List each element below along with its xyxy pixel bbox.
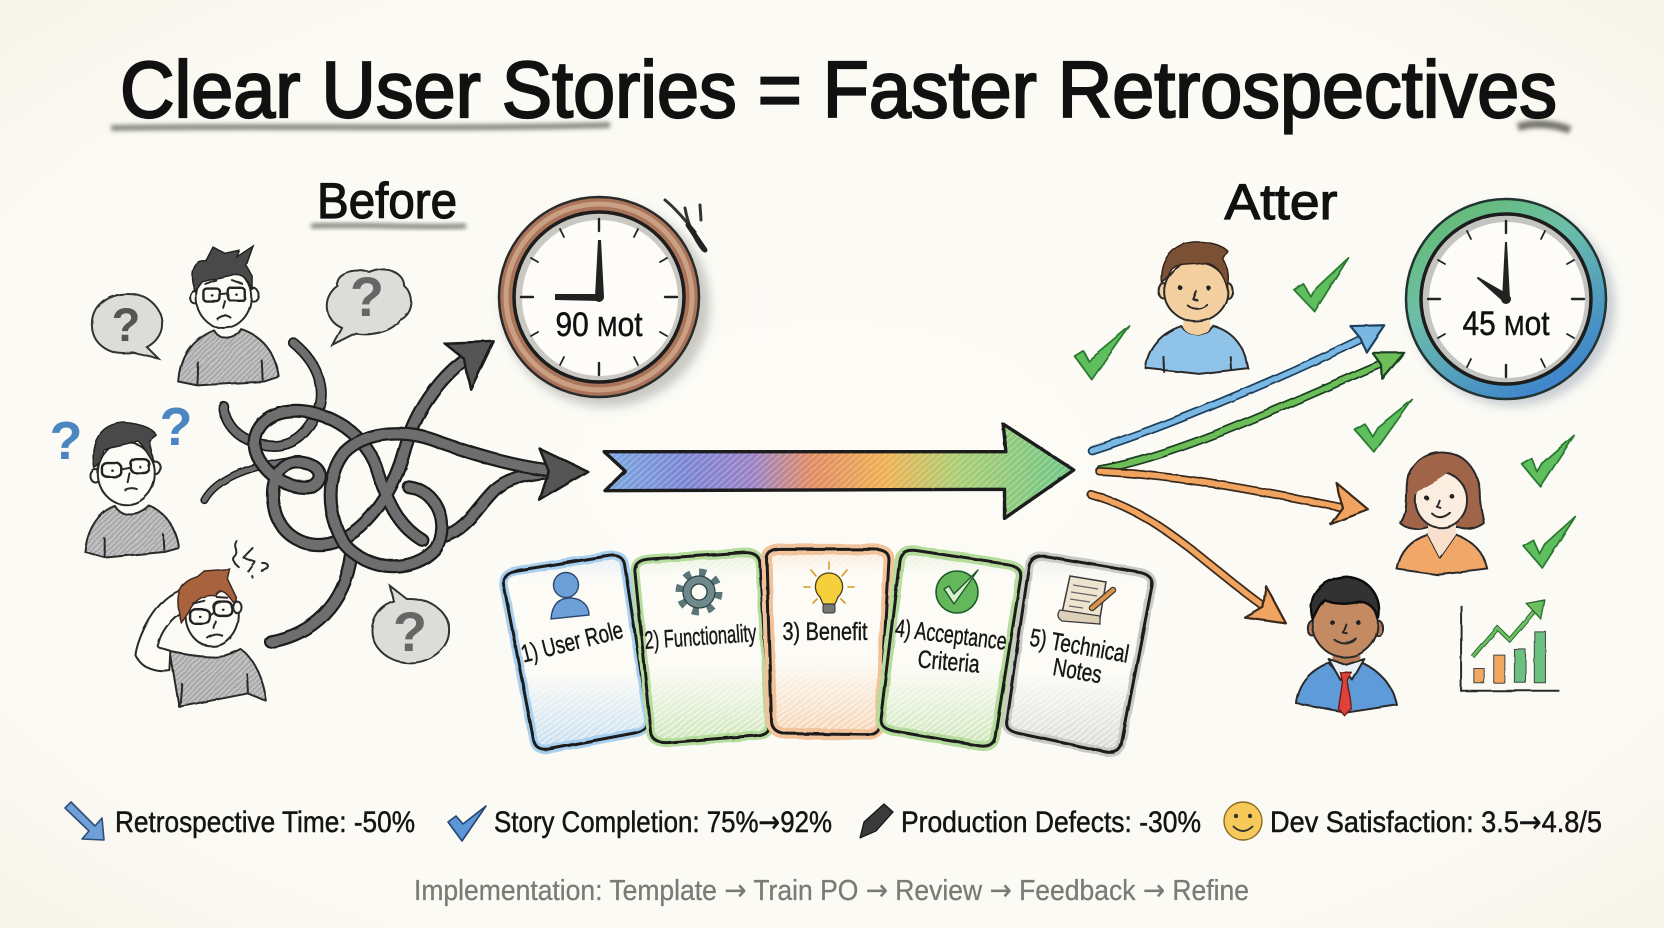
label: notes: Notes	[1051, 653, 1104, 689]
icon: acceptance check	[936, 570, 978, 613]
metric: story completion: Story Completion: 75%→92%	[494, 805, 832, 840]
person: top worried teammate	[178, 246, 279, 385]
question mark: bubble three: ?	[393, 600, 427, 663]
icon: pen	[860, 804, 893, 838]
clock: 90 minutes	[499, 197, 710, 407]
card: acceptance criteria	[881, 550, 1021, 746]
arrow: green to clock	[1100, 353, 1404, 470]
growth chart	[1461, 600, 1559, 691]
question mark: bubble two: ?	[350, 265, 384, 328]
metric: retrospective time: Retrospective Time: -50%	[115, 806, 415, 839]
label: user role: 1) User Role	[518, 616, 626, 668]
bubble: top right cloud	[327, 269, 411, 345]
person: smiling man with red tie	[1296, 577, 1397, 716]
icon: light bulb	[804, 562, 854, 613]
panel: metrics row	[65, 802, 1602, 841]
icon: blue check	[448, 806, 486, 841]
label: acceptance: 4) Acceptance	[894, 614, 1008, 656]
metric: production defects: Production Defects: -30%	[901, 806, 1201, 839]
icon: gear	[679, 572, 719, 612]
icon: blue down arrow	[65, 802, 104, 840]
arrow: orange to woman	[1100, 471, 1368, 524]
card: functionality	[635, 553, 769, 743]
illustration: confused team	[85, 246, 588, 707]
clock: 45 minutes	[1406, 199, 1615, 406]
panel: five user story cards	[503, 549, 1152, 752]
icon: smiley	[1224, 802, 1262, 840]
icon: user role	[551, 572, 589, 619]
person: left puzzled teammate	[85, 422, 179, 558]
person: smiling woman in orange top	[1397, 452, 1488, 575]
metric: dev satisfaction: Dev Satisfaction: 3.5→4.8/5	[1270, 805, 1602, 840]
question mark: bubble one: ?	[112, 298, 140, 351]
illustration: aligned team	[1075, 242, 1575, 716]
title: Clear User Stories = Faster Retrospectives	[120, 45, 1557, 134]
card: technical notes	[1006, 556, 1152, 752]
bubble: top left question	[92, 294, 162, 359]
person: smiling man in blue shirt	[1145, 242, 1248, 374]
card: user role	[503, 555, 648, 749]
heading: before: Before	[317, 173, 457, 229]
clock: 90 minutes: 90 Mot	[556, 306, 643, 344]
label: functionality: 2) Functionality	[644, 619, 758, 655]
question mark: blue left: ?	[50, 411, 82, 471]
label: benefit: 3) Benefit	[782, 618, 868, 646]
icon: technical notes	[1058, 576, 1113, 624]
heading: after: Atter	[1224, 174, 1338, 230]
question mark: blue right: ?	[160, 397, 192, 457]
panel: after state	[1075, 174, 1615, 716]
check marks	[1075, 258, 1575, 568]
arrow: orange to man	[1091, 494, 1286, 623]
clock: 45 minutes: 45 Mot	[1462, 305, 1550, 343]
card: benefit	[767, 549, 889, 735]
tangled process arrows	[204, 341, 588, 642]
arrow: blue to clock	[1092, 325, 1384, 450]
bubble: bottom question	[372, 586, 449, 663]
person: bottom head-scratching teammate	[135, 541, 268, 707]
label: technical: 5) Technical	[1028, 624, 1131, 669]
label: criteria: Criteria	[917, 645, 981, 679]
main rainbow arrow	[604, 424, 1074, 518]
panel: before state	[50, 173, 710, 707]
drawn card shapes	[503, 549, 1152, 752]
implementation steps footer: Implementation: Template → Train PO → Review → Feedback → Refine	[414, 873, 1249, 907]
